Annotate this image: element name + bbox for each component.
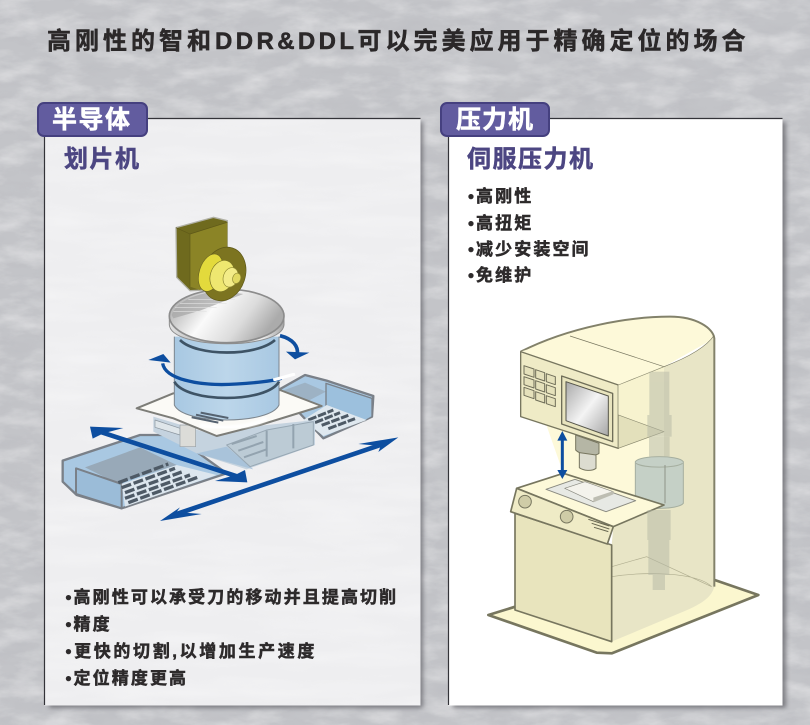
bullet list: semiconductor: [66, 587, 398, 688]
bullet list: semiconductor: •高刚性可以承受刀的移动并且提高切削: [66, 587, 398, 607]
tab: 半导体: [38, 103, 147, 136]
press ram: [576, 435, 599, 470]
bullet list: press: •免维护: [468, 266, 533, 285]
X axis arrow: [160, 437, 398, 521]
keypad: [524, 366, 555, 407]
tab: 压力机: 压力机: [456, 106, 533, 134]
blade hub: [194, 241, 253, 307]
panel shadow: [49, 122, 423, 708]
wafer disc: [169, 289, 284, 344]
motor housing: [635, 457, 683, 508]
rear tray: [278, 375, 373, 438]
control desk: [511, 473, 664, 544]
subheading: 划片机: 划片机: [64, 146, 139, 173]
panel shadow: [453, 122, 786, 708]
panel: semiconductor: [38, 103, 423, 708]
bullet list: semiconductor: •更快的切割,以增加生产速度: [66, 641, 316, 661]
panel background: [448, 118, 782, 706]
bullet list: semiconductor: •精度: [66, 615, 112, 634]
olive spindle bracket: [176, 217, 227, 291]
table plate: [137, 390, 322, 436]
illustration: dicing saw: [63, 217, 398, 521]
travel arrow: [557, 431, 567, 479]
head unit: [521, 336, 664, 448]
bullet list: press: •减少安装空间: [468, 239, 591, 259]
cabinet: [515, 513, 612, 642]
illustration: servo press: [488, 317, 758, 653]
bullet list: press: •高扭矩: [468, 213, 533, 233]
screen: [562, 376, 613, 442]
bullet list: semiconductor: •定位精度更高: [66, 668, 188, 688]
tab: 压力机: [441, 103, 549, 136]
subheading: 伺服压力机: 伺服压力机: [467, 146, 593, 173]
panel: press: [441, 103, 786, 708]
panel background: [44, 118, 420, 706]
front tray: [63, 435, 227, 508]
Y axis arrow: [90, 427, 247, 482]
bullet list: press: [468, 186, 591, 285]
transparent column: [521, 317, 714, 642]
carriage mechanism: [153, 417, 315, 469]
chuck cylinder: [174, 337, 279, 423]
rotation arrow: [148, 336, 309, 428]
spindle shaft: [647, 372, 672, 590]
bullet list: press: •高刚性: [468, 186, 533, 206]
tab: 半导体: 半导体: [52, 106, 130, 134]
base plate: [488, 578, 758, 653]
title: 高刚性的智和DDR&DDL可以完美应用于精确定位的场合: [47, 27, 749, 55]
